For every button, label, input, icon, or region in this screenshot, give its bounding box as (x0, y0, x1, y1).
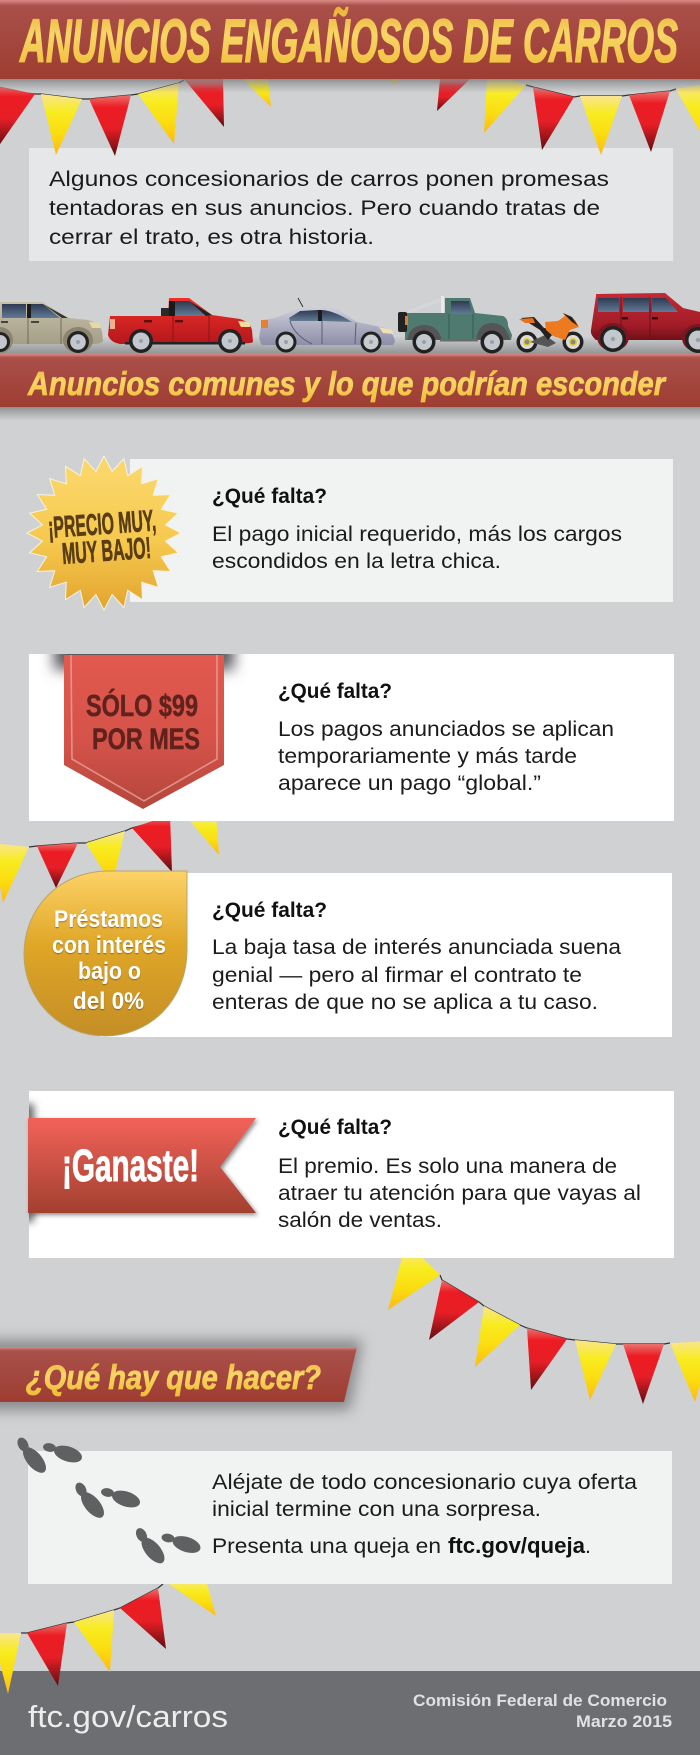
car: dark red SUV (591, 293, 700, 353)
what is missing text: aparece un pago “global.” (278, 771, 541, 795)
top banner shadow (0, 79, 700, 93)
what is missing text: El premio. Es solo una manera de (278, 1154, 617, 1178)
what is missing text (212, 899, 621, 1014)
what is missing text (212, 485, 622, 573)
what is missing text: genial — pero al firmar el contrato te (212, 963, 582, 987)
what is missing text: ¿Qué falta? (212, 485, 327, 508)
bunting: top right (392, 79, 700, 160)
motorcycle (516, 313, 584, 352)
panel 2: only 99 per month (29, 640, 674, 821)
starburst badge (27, 456, 181, 610)
what is missing text: ¿Qué falta? (278, 680, 392, 703)
what is missing text: ¿Qué falta? (212, 899, 327, 922)
advice text: inicial termine con una sorpresa. (212, 1497, 541, 1521)
ribbon badge (28, 1118, 256, 1213)
teardrop badge: Préstamos (54, 906, 163, 933)
cars row (0, 293, 700, 354)
car: green jeep (398, 296, 512, 354)
car: red pickup (108, 298, 253, 353)
teardrop badge: bajo o (78, 958, 141, 985)
advice text (212, 1470, 637, 1558)
footer bar (0, 1671, 700, 1755)
intro text panel: Algunos concesionarios de carros ponen promesas (49, 167, 609, 191)
what is missing text: salón de ventas. (278, 1208, 442, 1232)
starburst badge: MUY BAJO! (61, 532, 152, 571)
car: beige SUV (0, 302, 103, 353)
footer url: ftc.gov/carros (28, 1699, 228, 1734)
bunting: bottom left (0, 1580, 216, 1694)
what is missing text: ¿Qué falta? (278, 1116, 392, 1139)
section heading: ¿Qué hay que hacer? (26, 1359, 321, 1397)
what is missing text (278, 680, 614, 795)
what is missing text: La baja tasa de interés anunciada suena (212, 935, 621, 959)
footer agency and date (413, 1692, 672, 1731)
teardrop badge: con interés (52, 932, 166, 959)
footer agency and date: Marzo 2015 (576, 1713, 672, 1731)
panel 5: what to do (15, 1436, 672, 1584)
section shadow (0, 407, 700, 421)
section banner: common ads (0, 354, 700, 407)
panel 4: you won (20, 1091, 674, 1258)
ribbon badge: POR MES (92, 723, 200, 756)
intro text panel (29, 148, 673, 261)
what is missing text: enteras de que no se aplica a tu caso. (212, 990, 598, 1014)
what is missing text: temporariamente y más tarde (278, 744, 577, 768)
advice text: Presenta una queja en (212, 1534, 441, 1558)
bunting: top left (0, 79, 271, 156)
teardrop badge: del 0% (73, 988, 144, 1015)
ribbon badge (64, 655, 224, 809)
footer agency and date: Comisión Federal de Comercio (413, 1692, 667, 1710)
ribbon badge: SÓLO $99 (86, 687, 198, 723)
advice text: Aléjate de todo concesionario cuya oferta (212, 1470, 637, 1494)
section banner: what to do (0, 1340, 362, 1410)
what is missing text: escondidos en la letra chica. (212, 549, 501, 573)
road strip (0, 336, 700, 354)
icon: footprints (15, 1436, 203, 1567)
intro text panel: cerrar el trato, es otra historia. (49, 225, 374, 249)
title banner (0, 0, 700, 79)
what is missing text (278, 1116, 641, 1232)
car: silver sedan (259, 298, 395, 352)
panel 1: very low price (27, 456, 673, 610)
teardrop badge (24, 871, 187, 1036)
advice text: ftc.gov/queja (448, 1533, 586, 1558)
panel 3: low interest loans (24, 871, 672, 1037)
what is missing text: El pago inicial requerido, más los cargos (212, 522, 622, 546)
ribbon badge: ¡Ganaste! (62, 1140, 199, 1191)
advice text: . (585, 1534, 591, 1558)
bunting: lower right (388, 1250, 700, 1404)
what is missing text: atraer tu atención para que vayas al (278, 1181, 641, 1205)
intro text panel: tentadoras en sus anuncios. Pero cuando tratas de (49, 196, 600, 220)
bunting: middle (0, 815, 219, 903)
what is missing text: Los pagos anunciados se aplican (278, 717, 614, 741)
starburst badge: ¡PRECIO MUY, (47, 504, 157, 545)
